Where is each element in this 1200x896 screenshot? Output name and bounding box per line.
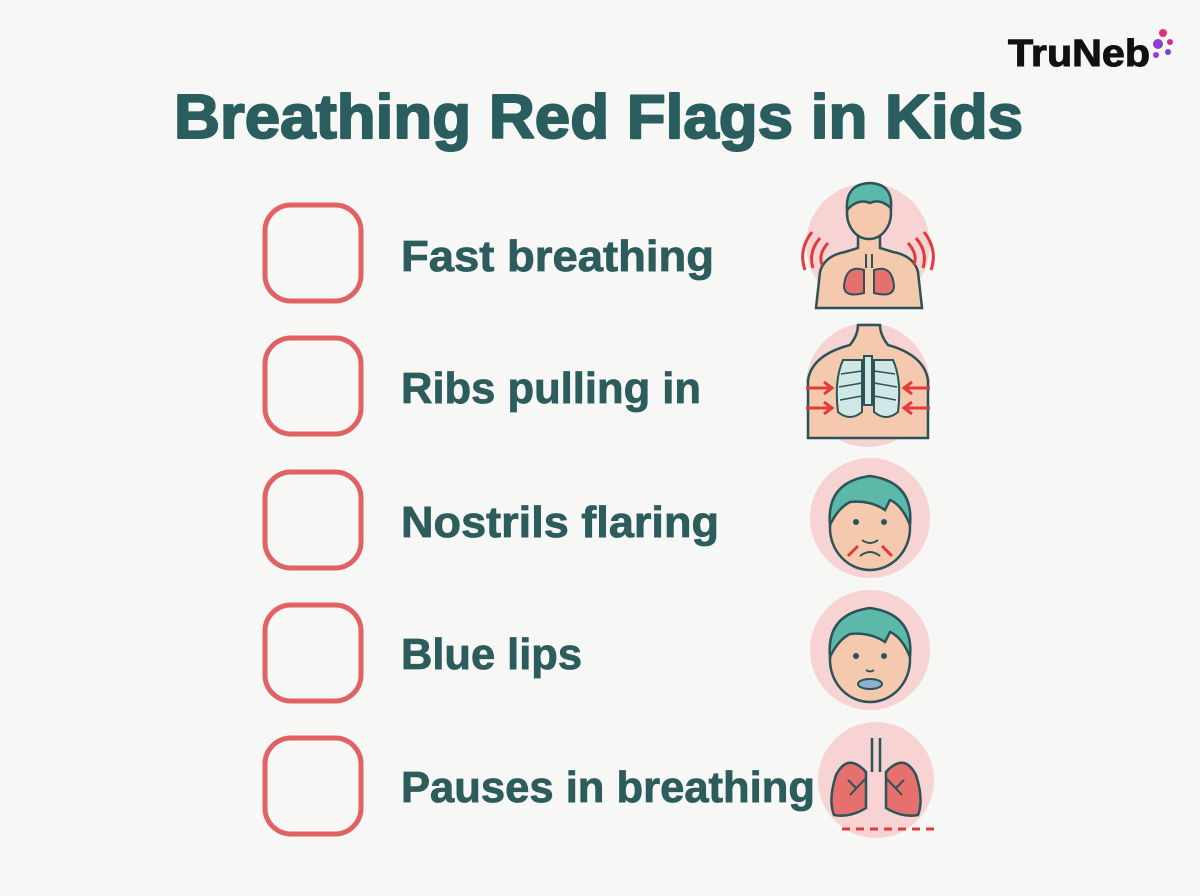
title: Breathing Red Flags in Kids — [174, 83, 1023, 152]
label 3: Nostrils flaring — [401, 498, 719, 547]
icon: child with lungs — [803, 183, 933, 308]
row 1: fast breathing — [265, 183, 933, 308]
label 5: Pauses in breathing — [401, 763, 815, 812]
checkbox 4 — [265, 605, 361, 701]
icon: lungs — [818, 722, 940, 838]
row 3: nostrils flaring — [265, 458, 930, 578]
icon: ribcage — [806, 323, 930, 447]
row 4: blue lips — [265, 590, 930, 710]
checkbox 3 — [265, 472, 361, 568]
icon: face with flaring nostrils — [810, 458, 930, 578]
row 5: pauses in breathing — [265, 722, 940, 838]
icon: face with blue lips — [810, 590, 930, 710]
label 2: Ribs pulling in — [401, 364, 701, 413]
row 2: ribs pulling in — [265, 323, 930, 447]
label 1: Fast breathing — [401, 232, 714, 281]
logo: TruNeb: TruNeb — [1008, 33, 1150, 75]
label 4: Blue lips — [401, 630, 582, 679]
checkbox 5 — [265, 738, 361, 834]
checkbox 2 — [265, 338, 361, 434]
checkbox 1 — [265, 205, 361, 301]
